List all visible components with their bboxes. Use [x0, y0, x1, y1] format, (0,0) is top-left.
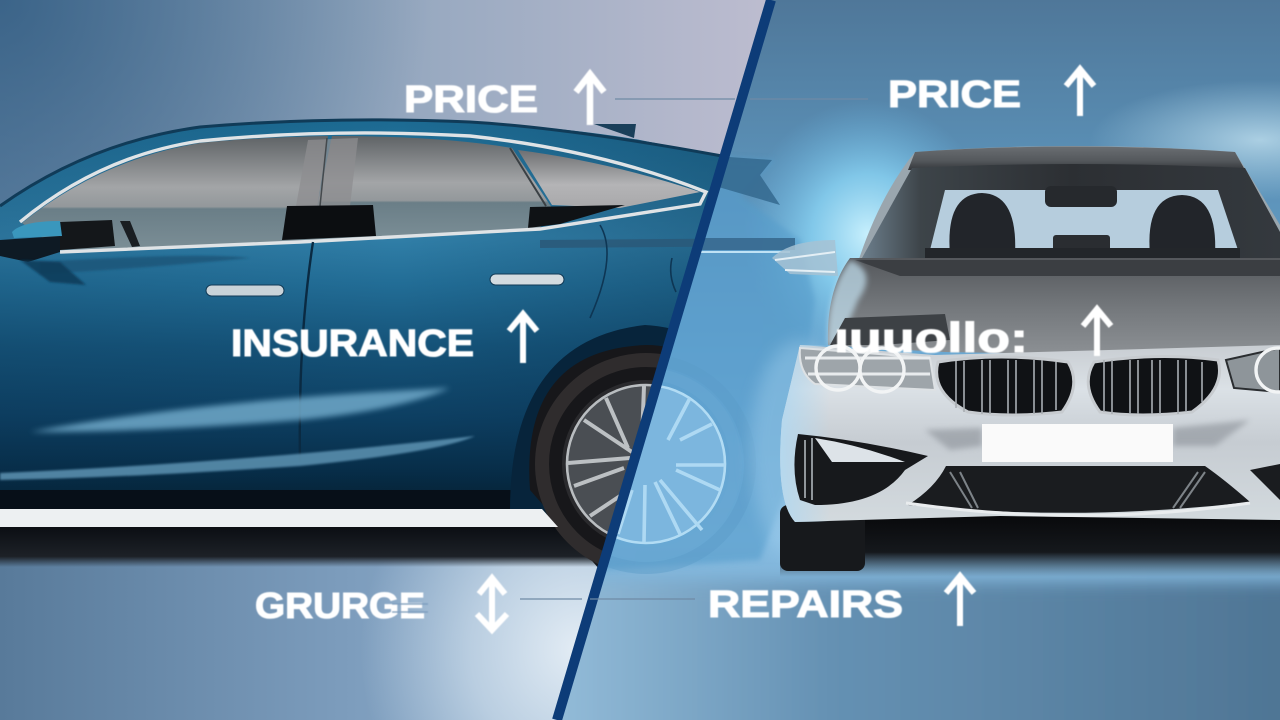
label: repairs	[708, 576, 974, 626]
label: price right: PRICE	[888, 74, 1021, 116]
right air intake	[1250, 464, 1280, 500]
roof edge	[0, 120, 722, 206]
label: insurance	[231, 314, 537, 365]
window chrome trim	[20, 133, 706, 252]
centre air intake	[908, 466, 1250, 513]
label: garbled right	[834, 309, 1111, 361]
grille bars	[956, 360, 1202, 414]
arrow: up	[509, 314, 537, 363]
label: garbled right: ıuuollo:	[834, 314, 1028, 361]
rear spoiler	[594, 124, 636, 138]
belt line highlight and crease	[54, 255, 246, 272]
door seams	[300, 242, 313, 462]
kidney grille right	[1088, 356, 1220, 415]
panel: right side car	[500, 0, 1280, 720]
seats	[949, 193, 1016, 248]
label: insurance: INSURANCE	[231, 323, 474, 365]
right background	[500, 0, 1280, 720]
label: garage: GRURGE	[255, 585, 425, 626]
body reflections	[30, 388, 450, 432]
strike marks through final letters	[392, 604, 428, 612]
label: price left	[404, 74, 604, 125]
ground shadow	[780, 515, 1280, 577]
wheel arch	[510, 325, 668, 510]
kidney grille left	[937, 357, 1074, 415]
sill highlight	[0, 509, 558, 527]
window pillar	[296, 138, 358, 206]
left front wheel	[780, 505, 865, 571]
arrow: up	[946, 576, 974, 626]
panel: left side car	[0, 0, 800, 720]
label: price left: PRICE	[404, 79, 538, 121]
connector lines	[520, 99, 868, 599]
shading beside plate	[925, 428, 982, 450]
label: garage	[255, 578, 507, 630]
glow behind car	[764, 114, 945, 331]
divider line	[557, 0, 771, 720]
arrow: up	[1066, 69, 1094, 116]
window dark interior blocks	[60, 220, 115, 250]
lower lip	[906, 503, 1250, 516]
side mirror	[0, 221, 86, 285]
ghost wheel	[610, 386, 726, 574]
label: repairs: REPAIRS	[708, 584, 903, 626]
licence plate blank	[982, 424, 1173, 462]
headlight right	[1226, 348, 1280, 392]
side windows	[22, 136, 328, 250]
dark backdrop behind garbled label	[830, 314, 950, 345]
headlight left	[800, 346, 935, 392]
ground shadow	[0, 525, 610, 567]
side mirror right car	[772, 240, 838, 276]
label: price right	[888, 69, 1094, 116]
left air intake	[794, 434, 928, 505]
arrow: up and down	[477, 578, 507, 630]
front bumper	[780, 345, 1280, 522]
windshield	[862, 164, 1280, 260]
roof and cabin	[859, 146, 1280, 258]
door handles	[206, 274, 564, 296]
ghost fin	[720, 157, 780, 205]
arrow: up	[576, 74, 604, 125]
hood	[828, 258, 1280, 358]
front view car	[772, 146, 1280, 571]
front wheel	[529, 345, 663, 567]
ghost of side car behind divider	[606, 157, 815, 574]
side view car body	[0, 118, 720, 567]
left background	[0, 0, 780, 720]
arrow: up	[1083, 309, 1111, 356]
